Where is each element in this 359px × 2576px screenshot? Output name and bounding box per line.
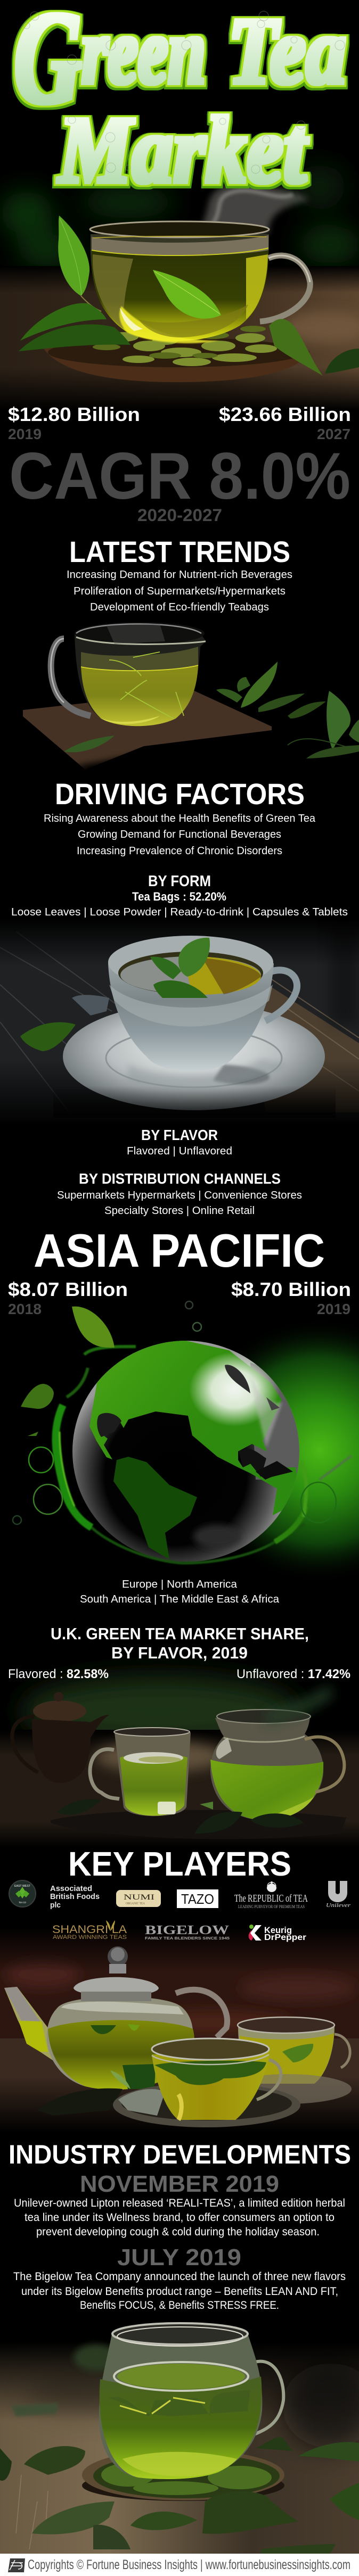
stat: 2027 market size: 2027 bbox=[317, 426, 350, 442]
segment: by form: Tea Bags : 52.20% bbox=[132, 890, 226, 903]
teapot body bbox=[47, 1996, 193, 2090]
development: november 2019: Unilever-owned Lipton released ‘REALI-TEAS’, a limited edition herbal bbox=[14, 2197, 345, 2209]
segment: by flavor bbox=[127, 1127, 232, 1157]
teapot lid bbox=[74, 1977, 159, 1996]
title: Green Tea Market: reen bbox=[81, 0, 206, 104]
logos row bbox=[9, 1880, 351, 1910]
segment: by distribution channels bbox=[57, 1170, 302, 1217]
driving factors list: Increasing Prevalence of Chronic Disorders bbox=[77, 845, 282, 857]
segment: by distribution channels: Supermarkets Hypermarkets | Convenience Stores bbox=[57, 1190, 302, 1201]
logo: The Republic of Tea bbox=[234, 1881, 308, 1909]
logo: The Republic of Tea: The REPUBLIC of TEA bbox=[234, 1893, 308, 1904]
stat: asia pacific 2019: 2019 bbox=[317, 1301, 350, 1317]
left leaf bbox=[21, 1384, 54, 1409]
stat: 2019 market size: $12.80 Billion bbox=[8, 403, 140, 425]
stat: asia pacific 2018: $8.07 Billion bbox=[8, 1278, 128, 1300]
CAGR headline: 2020-2027 bbox=[137, 506, 222, 525]
trends list: Increasing Demand for Nutrient-rich Beverages bbox=[67, 569, 292, 581]
stat: 2027 market size: $23.66 Billion bbox=[219, 403, 351, 425]
heading: driving factors: DRIVING FACTORS bbox=[55, 777, 305, 811]
driving factors list: Rising Awareness about the Health Benefits of Green Tea bbox=[44, 813, 316, 824]
mug body bbox=[99, 2334, 262, 2479]
cup bowl bbox=[108, 963, 274, 1071]
saucer bbox=[63, 1003, 325, 1110]
segment: by distribution channels: Specialty Stores | Online Retail bbox=[104, 1205, 255, 1217]
north america land crescent bbox=[89, 1339, 298, 1515]
logo: Bigelow: BIGELOW bbox=[145, 1923, 229, 1937]
leaf inside cup bbox=[153, 270, 221, 319]
heading: key players: KEY PLAYERS bbox=[68, 1845, 291, 1883]
logo: Associated British Foods: British Foods bbox=[50, 1892, 100, 1901]
development: july 2019 description: Benefits FOCUS, & Benefits STRESS FREE. bbox=[80, 2299, 279, 2311]
heading: U.K. market share: BY FLAVOR, 2019 bbox=[111, 1644, 248, 1662]
bubbles bbox=[13, 1301, 336, 1524]
stat: asia pacific 2018: 2018 bbox=[8, 1301, 42, 1317]
coaster bbox=[82, 2470, 284, 2501]
leaves around cup bbox=[58, 216, 89, 296]
teapot handle bbox=[176, 1989, 227, 2037]
illustration: glass jug of green tea on board bbox=[23, 622, 359, 777]
segment: by distribution channels: BY DISTRIBUTION CHANNELS bbox=[79, 1170, 281, 1187]
trends list: Development of Eco-friendly Teabags bbox=[90, 601, 269, 613]
logo: Tazo: TAZO bbox=[181, 1891, 214, 1907]
logos row two bbox=[52, 1920, 306, 1942]
logo: Keurig Dr Pepper bbox=[249, 1925, 306, 1942]
leaf on table bbox=[20, 1022, 76, 1051]
scattered leaves bbox=[0, 2437, 359, 2554]
regional list: South America | The Middle East & Africa bbox=[80, 1594, 280, 1605]
front cup bbox=[152, 2054, 269, 2120]
logo: Numi: ORGANIC TEA bbox=[126, 1902, 145, 1905]
top leaf bbox=[72, 1307, 115, 1348]
logo: Unilever bbox=[326, 1881, 351, 1909]
logo: Numi: NUMI bbox=[124, 1893, 154, 1902]
mug bbox=[115, 1732, 191, 1816]
segment: by form bbox=[11, 873, 348, 918]
front saucer bbox=[113, 2083, 300, 2127]
stat: asia pacific 2019: $8.70 Billion bbox=[231, 1278, 351, 1300]
heading: U.K. market share: U.K. GREEN TEA MARKET SHARE, bbox=[51, 1624, 309, 1643]
illustration: green glass globe bbox=[13, 1301, 359, 1581]
dark teapot silhouette bbox=[12, 1692, 109, 1783]
share: flavored: Flavored : 82.58% bbox=[8, 1667, 109, 1681]
development: july 2019: JULY 2019 bbox=[117, 2244, 241, 2270]
stat: asia pacific 2019 bbox=[231, 1278, 351, 1317]
heading: asia pacific: ASIA PACIFIC bbox=[34, 1224, 325, 1277]
stat: asia pacific 2018 bbox=[8, 1278, 128, 1317]
bubble on top of teapot bbox=[108, 1946, 128, 1967]
logo: Shangri-La: AWARD WINNING TEAS bbox=[53, 1934, 127, 1941]
logo: Unilever: Unilever bbox=[326, 1902, 351, 1909]
jug bbox=[210, 1715, 323, 1820]
stat: 2019 market size: 2019 bbox=[8, 426, 42, 442]
bottom glimmer bbox=[193, 1525, 241, 1548]
illustration: white cup and saucer bbox=[0, 918, 359, 1126]
trends list: Proliferation of Supermarkets/Hypermarkets bbox=[74, 585, 285, 597]
liquid ring bbox=[55, 1347, 352, 1563]
logo: Bigelow: FAMILY TEA BLENDERS SINCE 1945 bbox=[145, 1936, 230, 1941]
heading: U.K. market share bbox=[51, 1624, 309, 1662]
illustration: mug and jug of green tea bbox=[0, 1677, 359, 1847]
back cup bbox=[238, 2017, 334, 2084]
title: Green Tea Market bbox=[14, 0, 346, 203]
logo: Associated British Foods bbox=[50, 1884, 100, 1910]
glass cup bbox=[91, 234, 269, 341]
regional list: Europe | North America bbox=[122, 1579, 238, 1590]
logo: East West Tea: TEA CO bbox=[19, 1901, 26, 1904]
logo: Bigelow bbox=[145, 1923, 230, 1941]
development: november 2019: NOVEMBER 2019 bbox=[80, 2171, 279, 2197]
driving factors list bbox=[44, 813, 316, 857]
logo: Shangri-La bbox=[52, 1920, 127, 1941]
segment: by form: BY FORM bbox=[148, 873, 211, 890]
logo: Keurig Dr Pepper: Keurig bbox=[264, 1925, 292, 1935]
logo: Keurig Dr Pepper: DrPepper bbox=[264, 1933, 306, 1942]
title: Green Tea Market: Market bbox=[57, 97, 308, 203]
illustration: glass teapot and cups bbox=[0, 1927, 359, 2132]
development: july 2019 description: The Bigelow Tea Company announced the launch of three new flavors bbox=[13, 2270, 346, 2283]
segment: by flavor: BY FLAVOR bbox=[141, 1127, 218, 1143]
footer bar bbox=[0, 2554, 359, 2576]
cup handle bbox=[265, 970, 297, 1021]
leaf behind cup bbox=[123, 2064, 156, 2089]
south america bbox=[113, 1457, 197, 1559]
logo: East West Tea bbox=[9, 1880, 36, 1907]
logo: Fortune Business Insights bbox=[8, 2558, 25, 2572]
stat: 2019 market size bbox=[8, 403, 140, 442]
segment: by flavor: Flavored | Unflavored bbox=[127, 1145, 232, 1157]
logo: Associated British Foods: Associated bbox=[50, 1884, 92, 1893]
grey right limb bbox=[250, 1363, 304, 1480]
teapot spout bbox=[4, 1987, 56, 2062]
logo: Associated British Foods: plc bbox=[50, 1901, 61, 1910]
trends list bbox=[67, 569, 292, 613]
plate with leaves bbox=[44, 343, 310, 382]
segment: by form: Loose Leaves | Loose Powder | Ready-to-drink | Capsules & Tablets bbox=[11, 906, 348, 918]
regional list bbox=[80, 1579, 280, 1605]
hero illustration: steaming glass cup of green tea bbox=[0, 165, 359, 410]
development: july 2019 description bbox=[13, 2270, 346, 2311]
heading: latest trends: LATEST TRENDS bbox=[69, 535, 290, 568]
share: unflavored: Unflavored : 17.42% bbox=[236, 1667, 350, 1681]
stat: 2027 market size bbox=[219, 403, 351, 442]
logo: Shangri-La: SHANGRI LA bbox=[52, 1923, 127, 1936]
mint leaves bbox=[178, 938, 210, 977]
illustration: glass mug on wood table bbox=[0, 2323, 359, 2554]
dark leaves bbox=[58, 1799, 304, 1834]
logo: The Republic of Tea: LEADING PURVEYOR OF PREMIUM TEAS bbox=[238, 1904, 305, 1909]
mug handle bbox=[249, 2362, 283, 2437]
logo: East West Tea: EAST WEST bbox=[14, 1885, 30, 1888]
development: july 2019 description: under its Bigelow Benefits product range – Benefits LEAN AND FIT, bbox=[21, 2285, 338, 2298]
logo: Numi bbox=[116, 1890, 161, 1907]
development: november 2019 bbox=[14, 2171, 345, 2238]
development: november 2019: tea line under its Wellness brand, to offer consumers an option to bbox=[25, 2211, 334, 2224]
development: november 2019: prevent developing cough & cold during the holiday season. bbox=[36, 2226, 320, 2238]
driving factors list: Growing Demand for Functional Beverages bbox=[78, 829, 281, 840]
